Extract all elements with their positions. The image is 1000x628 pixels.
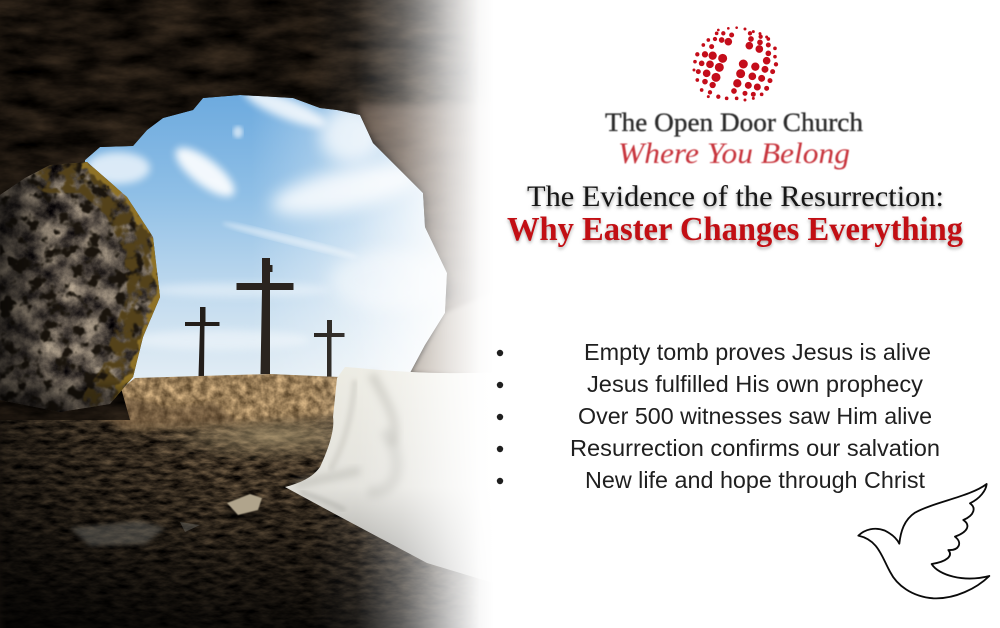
logo wordmark: The Open Door Church bbox=[605, 108, 863, 137]
logo globe of red dots forming a cross bbox=[693, 27, 778, 101]
title line 2: Why Easter Changes Everything bbox=[507, 213, 963, 250]
title bbox=[507, 180, 963, 250]
bullet 1: Empty tomb proves Jesus is alive bbox=[584, 339, 931, 365]
stone on the ground bbox=[225, 494, 265, 519]
white fade into the page bbox=[310, 0, 494, 628]
sky with clouds bbox=[85, 95, 447, 386]
logo: The Open Door Church bbox=[605, 27, 863, 170]
cross: left bbox=[185, 307, 220, 376]
logo tagline: Where You Belong bbox=[618, 137, 850, 170]
burial cloth bbox=[285, 367, 500, 585]
bullet 4: Resurrection confirms our salvation bbox=[570, 435, 940, 461]
ground bbox=[0, 411, 438, 628]
boulder bbox=[0, 162, 160, 412]
icon: dove outline bbox=[858, 484, 989, 598]
title line 1: The Evidence of the Resurrection: bbox=[527, 182, 944, 215]
bullet list bbox=[497, 339, 940, 493]
title line 1: The Evidence of the Resurrection: bbox=[527, 180, 944, 213]
cave rock walls bbox=[0, 0, 500, 420]
bullet 2: Jesus fulfilled His own prophecy bbox=[587, 371, 923, 397]
photo: empty tomb with crosses on the hill bbox=[0, 0, 502, 628]
title line 2: Why Easter Changes Everything bbox=[507, 211, 963, 248]
moss on the boulder bbox=[50, 176, 145, 400]
gold moss rim bbox=[85, 164, 160, 398]
bullet 3: Over 500 witnesses saw Him alive bbox=[578, 403, 932, 429]
cross: center bbox=[236, 258, 294, 374]
cross: right bbox=[314, 320, 344, 377]
bullet 5: New life and hope through Christ bbox=[585, 467, 926, 493]
hill of rocks bbox=[96, 374, 338, 436]
